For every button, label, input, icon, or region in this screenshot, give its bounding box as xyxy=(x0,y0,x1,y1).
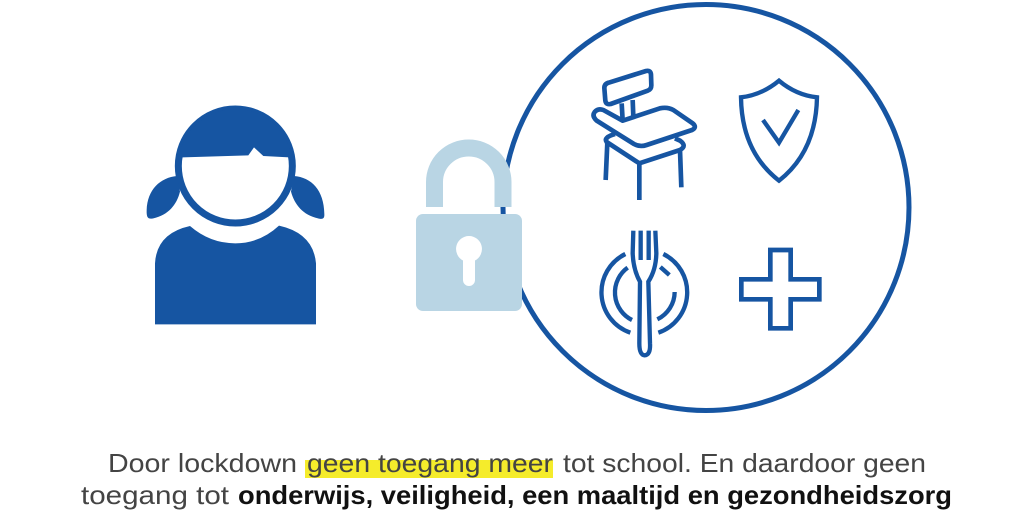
caption xyxy=(81,448,952,510)
girl hair xyxy=(178,109,292,166)
girl body xyxy=(155,226,316,324)
girl right pigtail xyxy=(291,176,324,219)
caption line 2: toegang tot xyxy=(81,480,230,510)
icon: padlock xyxy=(416,148,522,311)
icon: medical cross xyxy=(741,250,819,328)
caption line 2: onderwijs, veiligheid, een maaltijd en gezondheidszorg xyxy=(238,480,952,510)
icon: fork and plate xyxy=(601,231,687,355)
icon: girl xyxy=(147,109,324,324)
icon: shield with check xyxy=(741,81,817,181)
caption line 1: geen toegang meer xyxy=(307,448,553,478)
caption line 1: Door lockdown xyxy=(108,448,297,478)
girl left pigtail xyxy=(147,176,180,219)
padlock shackle xyxy=(434,148,503,207)
padlock body xyxy=(416,214,522,311)
highlight xyxy=(305,460,553,478)
caption line 1: tot school. En daardoor geen xyxy=(563,448,926,478)
big circle xyxy=(503,4,909,410)
padlock keyhole xyxy=(456,236,482,286)
icon: school desk xyxy=(594,71,695,200)
caption line 1 xyxy=(108,448,926,478)
girl head ring xyxy=(178,109,292,223)
